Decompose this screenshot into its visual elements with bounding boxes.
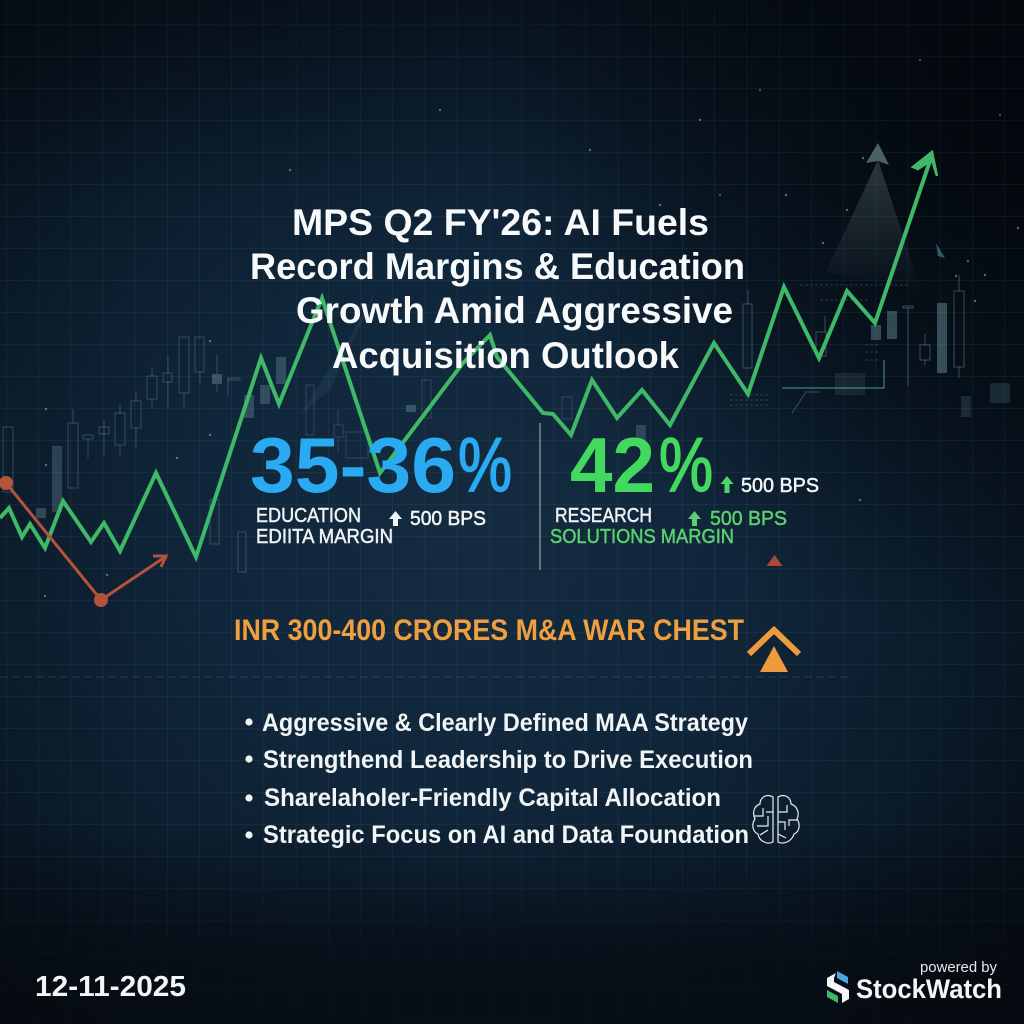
value 42%: %	[659, 423, 713, 508]
small red triangle	[766, 555, 782, 566]
label education margin	[256, 505, 393, 548]
rising cone arrow	[826, 143, 945, 292]
title: Acquisition Outlook	[332, 335, 679, 376]
label research margin: RESEARCH	[555, 505, 652, 527]
label research margin: SOLUTIONS MARGIN	[550, 526, 734, 548]
value 35-36%: 35-36	[250, 421, 456, 509]
icon: AI brain	[753, 796, 799, 843]
icon: orange chevron and triangle	[749, 630, 799, 672]
background candlesticks right	[730, 275, 1010, 417]
red downturn line with arrow	[0, 476, 166, 607]
title	[250, 202, 745, 376]
logo: powered by StockWatch: powered by	[920, 959, 997, 976]
value 42%: 42	[570, 421, 655, 509]
title: MPS Q2 FY'26: AI Fuels	[292, 202, 709, 243]
bullet 3: Sharelaholer-Friendly Capital Allocation	[264, 784, 721, 812]
delta 500 BPS top: 500 BPS	[741, 475, 819, 497]
delta 500 BPS white: 500 BPS	[410, 508, 486, 530]
title: Record Margins & Education	[250, 246, 745, 287]
title: Growth Amid Aggressive	[296, 290, 733, 331]
logo: powered by StockWatch	[827, 959, 1002, 1004]
icon: StockWatch mark	[827, 971, 849, 1003]
label research margin	[550, 505, 734, 548]
delta 500 BPS green: 500 BPS	[710, 508, 787, 530]
stat: research margin	[550, 421, 819, 548]
bullet list	[245, 709, 753, 849]
bullet 1: Aggressive & Clearly Defined MAA Strategy	[262, 709, 748, 737]
bullet 4: Strategic Focus on AI and Data Foundation	[263, 821, 749, 849]
label education margin: EDUCATION	[256, 505, 361, 527]
logo: powered by StockWatch: StockWatch	[856, 974, 1002, 1004]
dashed divider	[0, 676, 850, 678]
green growth line chart with arrow	[0, 152, 937, 557]
vertical divider	[539, 423, 541, 570]
background specks	[44, 59, 1019, 621]
background candlesticks middle	[300, 284, 646, 458]
background candlesticks left	[3, 337, 286, 572]
war chest heading: INR 300-400 CRORES M&A WAR CHEST	[234, 614, 744, 647]
bullet 2: Strengthend Leadership to Drive Execution	[263, 746, 753, 774]
value 42%	[570, 421, 713, 509]
value 35-36%: %	[458, 423, 512, 508]
date: 12-11-2025	[35, 971, 186, 1003]
stat: education margin	[250, 421, 512, 548]
label education margin: EDIITA MARGIN	[256, 526, 393, 548]
